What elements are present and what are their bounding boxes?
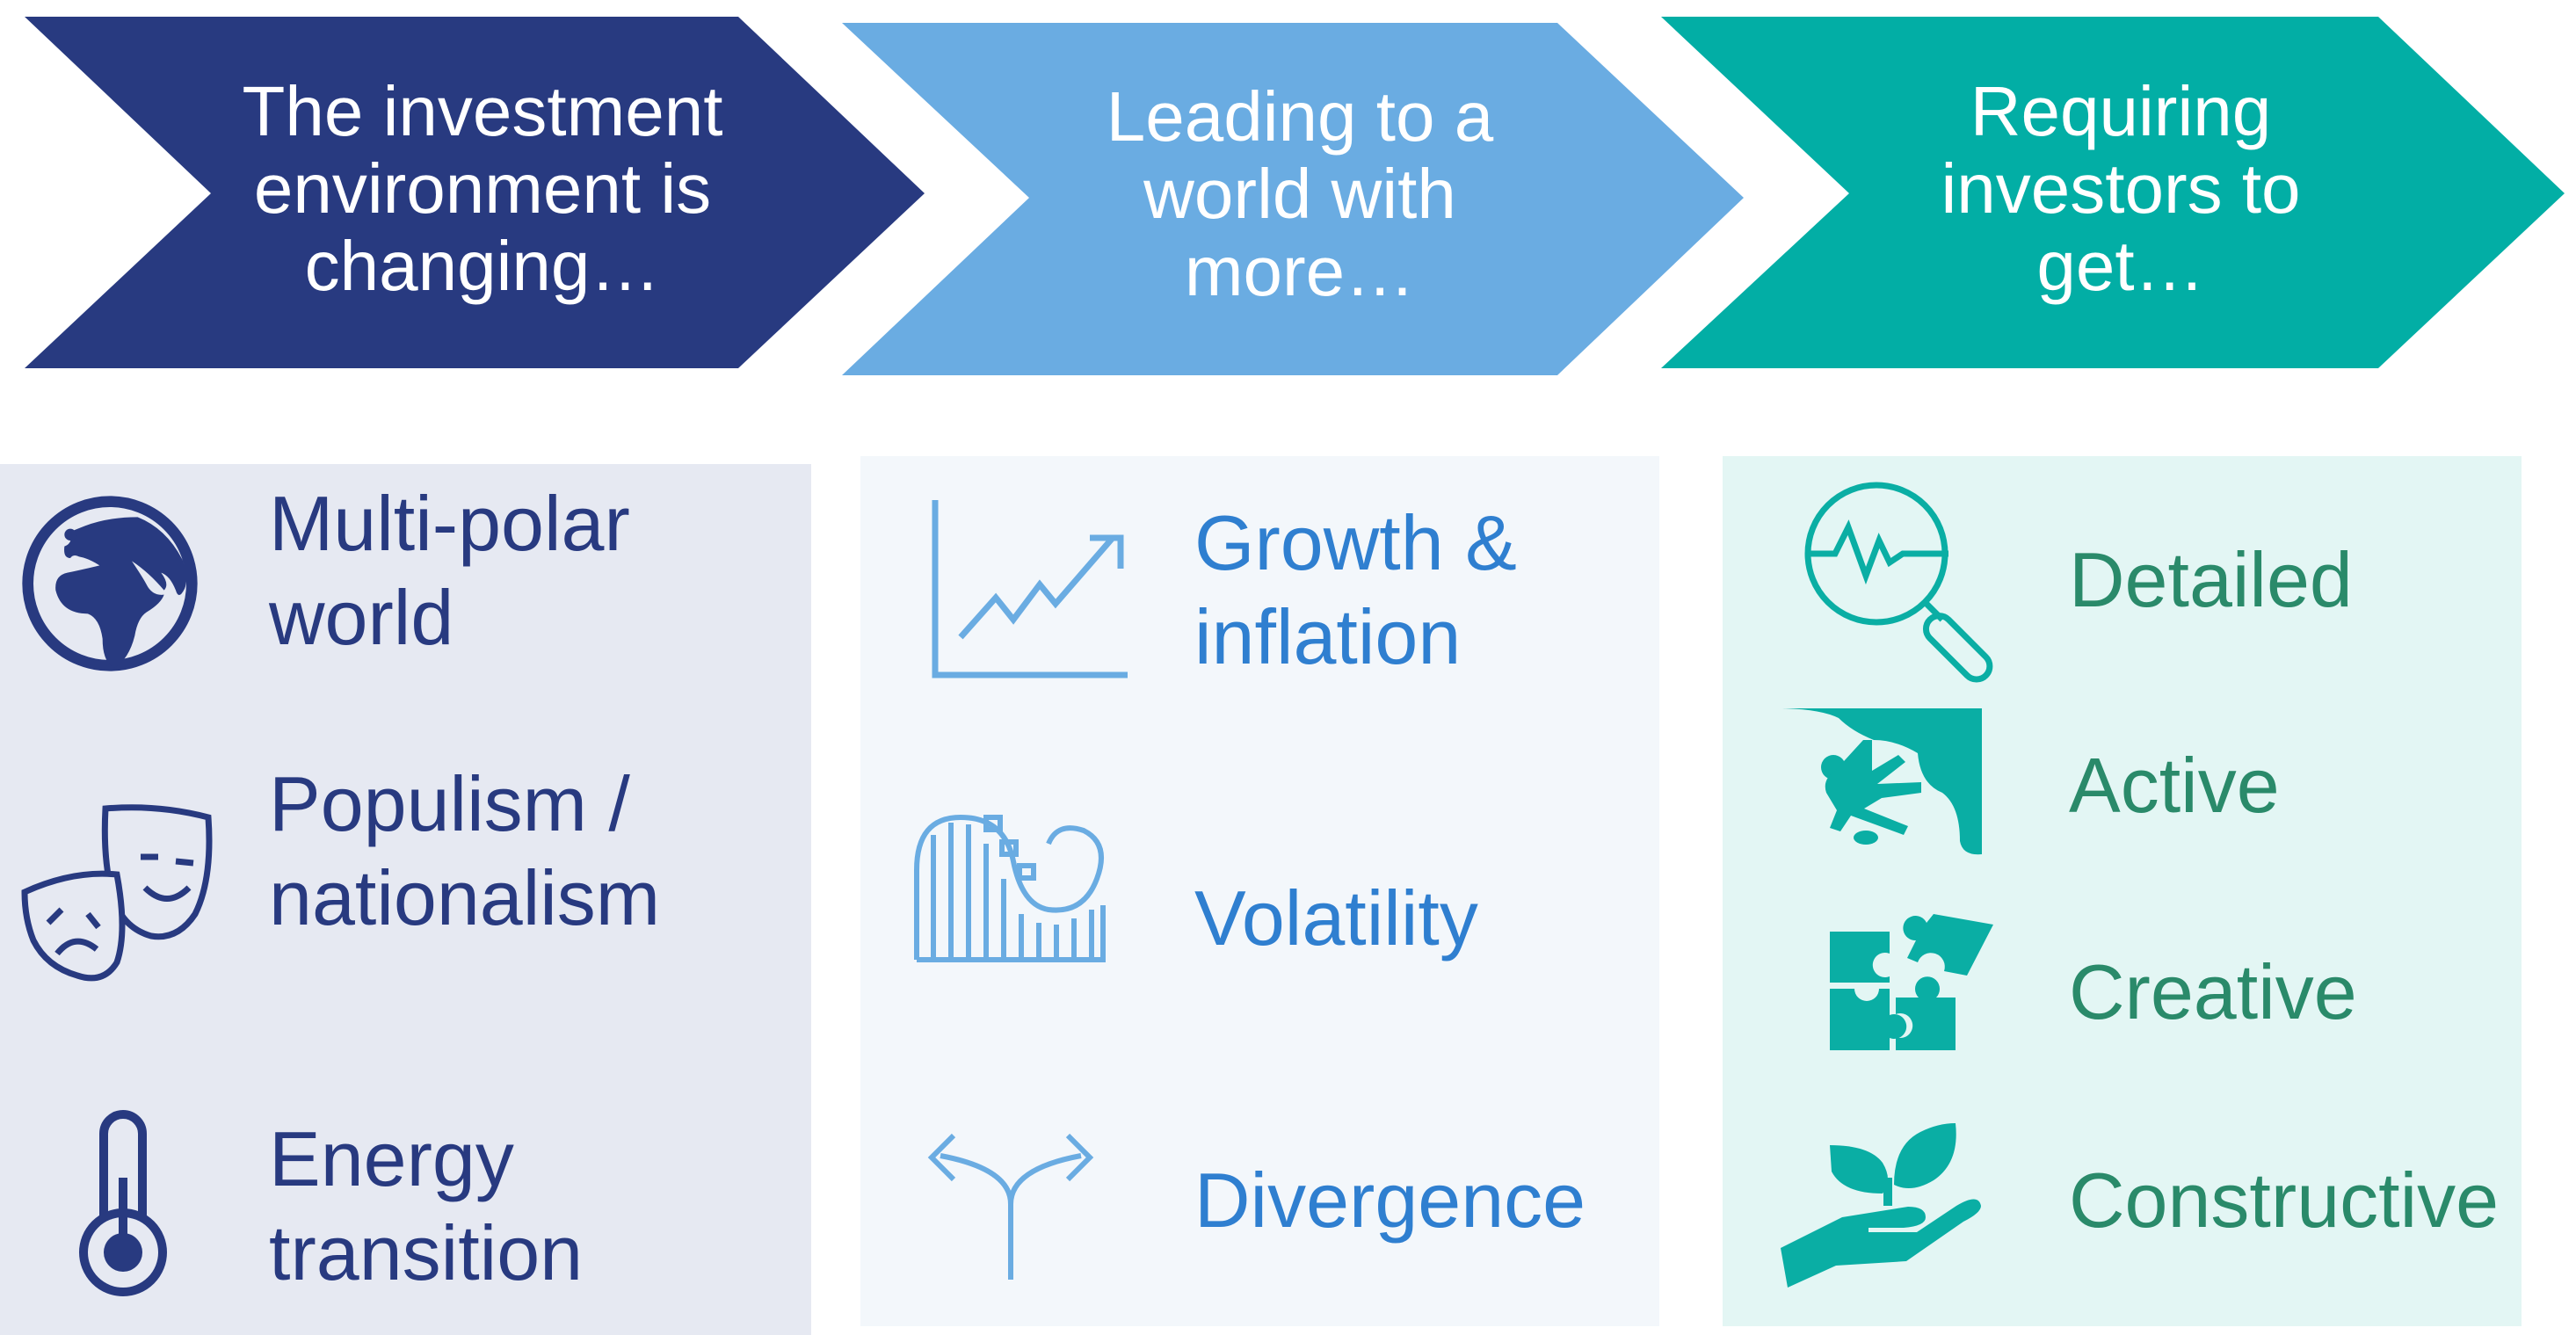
text: volatility: Volatility xyxy=(1194,874,1478,961)
text: populism / nationalism: nationalism xyxy=(269,854,660,941)
icon: climber xyxy=(1782,708,1982,854)
icon: globe xyxy=(28,502,192,668)
chevron 1: investment environment: environment is xyxy=(254,149,711,228)
chevron 3: requiring investors: investors to xyxy=(1941,149,2301,228)
text: divergence: Divergence xyxy=(1194,1157,1586,1244)
icon: growth chart xyxy=(935,500,1128,675)
chevron 2: leading to a world: Leading to a xyxy=(1107,77,1494,156)
text: energy transition: transition xyxy=(269,1209,583,1296)
chevron 2: leading to a world xyxy=(842,23,1744,375)
text: energy transition xyxy=(269,1115,583,1296)
icon: diverging arrows xyxy=(932,1135,1090,1280)
chevron 3: requiring investors: Requiring xyxy=(1970,72,2271,150)
chevron 1: investment environment: changing… xyxy=(305,227,660,305)
text: growth & inflation: Growth & xyxy=(1194,499,1517,586)
text: populism / nationalism: Populism / xyxy=(269,760,630,847)
panel: changes xyxy=(0,464,811,1335)
chevron 2: leading to a world: world with xyxy=(1143,155,1456,233)
icon: roller coaster xyxy=(917,817,1103,960)
text: growth & inflation: inflation xyxy=(1194,593,1461,680)
chevron 2: leading to a world: more… xyxy=(1185,232,1415,310)
text: energy transition: Energy xyxy=(269,1115,514,1202)
text: populism / nationalism xyxy=(269,760,660,941)
icon: magnifier xyxy=(1808,485,1995,685)
text: multi-polar world: world xyxy=(268,574,454,661)
text: detailed: Detailed xyxy=(2069,536,2353,623)
text: constructive: Constructive xyxy=(2069,1157,2499,1244)
text: multi-polar world: Multi-polar xyxy=(269,480,630,567)
chevron 1: investment environment xyxy=(25,17,925,368)
text: creative: Creative xyxy=(2069,948,2357,1035)
chevron 3: requiring investors: get… xyxy=(2036,227,2205,305)
text: multi-polar world xyxy=(268,480,630,661)
icon: hand with plant xyxy=(1781,1123,1981,1288)
text: active: Active xyxy=(2069,742,2280,829)
chevron 1: investment environment: The investment xyxy=(243,72,722,150)
icon: thermometer xyxy=(83,1114,163,1292)
panel: investor responses xyxy=(1723,456,2522,1326)
icon: puzzle xyxy=(1830,914,1993,1050)
icon: theatre masks xyxy=(25,808,209,978)
chevron 3: requiring investors xyxy=(1661,17,2565,368)
panel: effects xyxy=(860,456,1659,1326)
text: growth & inflation xyxy=(1194,499,1517,680)
